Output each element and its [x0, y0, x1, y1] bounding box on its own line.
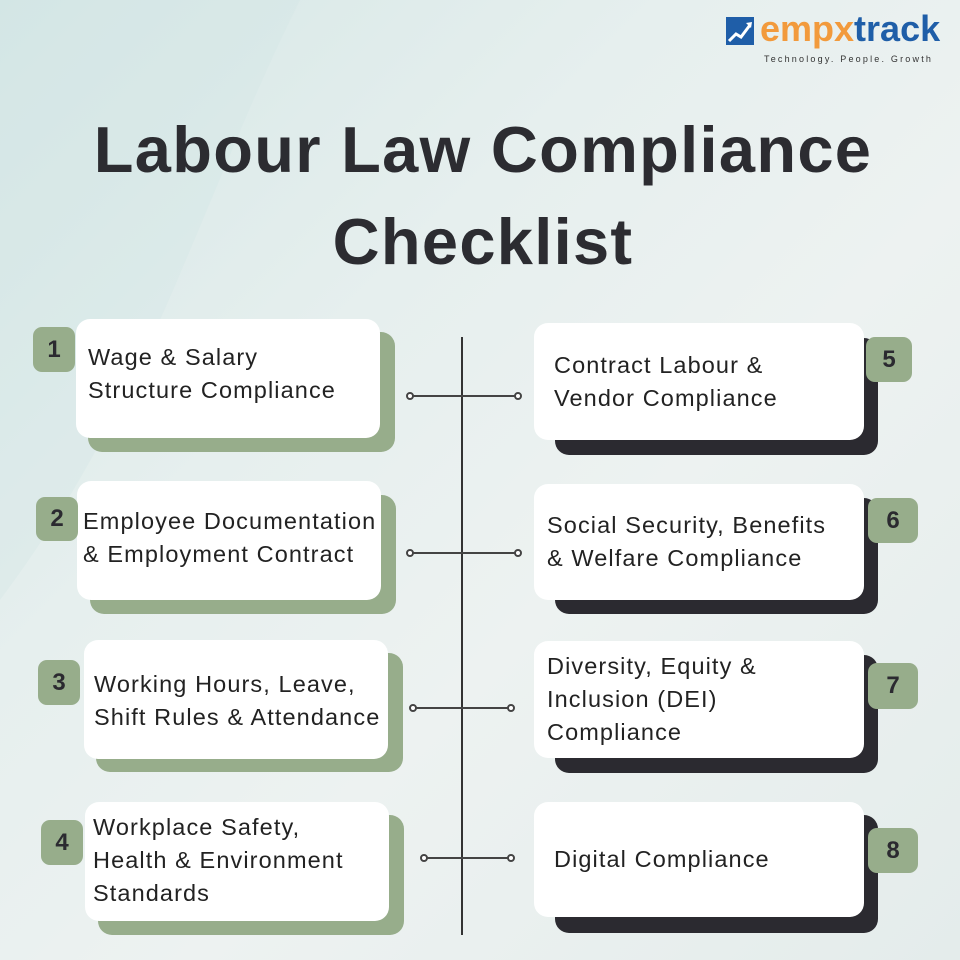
title line 2: Checklist: [333, 205, 633, 278]
item 7: Inclusion (DEI): [547, 686, 718, 712]
logo: Technology. People. Growth: [764, 54, 933, 64]
item 4: Health & Environment: [93, 847, 344, 873]
item 8: Digital Compliance: [554, 846, 770, 872]
item 4: Standards: [93, 880, 210, 906]
icon: chart logo: [726, 17, 754, 45]
logo: [726, 8, 940, 64]
item 1: [33, 319, 395, 452]
item 5: Contract Labour &: [554, 352, 763, 378]
item 2: Employee Documentation: [83, 508, 376, 534]
item 3: 3: [52, 668, 66, 696]
item 5: Vendor Compliance: [554, 384, 778, 410]
item 6: 6: [886, 506, 900, 534]
item 3: Shift Rules & Attendance: [94, 704, 380, 730]
item 3: Working Hours, Leave,: [94, 671, 356, 697]
item 4: Workplace Safety,: [93, 814, 300, 840]
logo: empxtrack: [760, 8, 940, 49]
item 6: & Welfare Compliance: [547, 545, 802, 571]
item 1: 1: [47, 336, 61, 362]
item 6: Social Security, Benefits: [547, 512, 826, 538]
item 6: [534, 484, 918, 614]
item 2: [36, 481, 396, 614]
item 2: & Employment Contract: [83, 541, 354, 567]
item 7: 7: [886, 672, 900, 699]
item 5: [534, 323, 912, 455]
item 7: Compliance: [547, 719, 682, 745]
item 5: 5: [882, 346, 896, 372]
item 7: Diversity, Equity &: [547, 653, 757, 679]
item 1: Structure Compliance: [88, 377, 336, 403]
item 1: Wage & Salary: [88, 344, 258, 370]
item 7: [534, 641, 918, 773]
item 8: [534, 802, 918, 933]
item 2: 2: [50, 505, 64, 532]
item 3: [38, 640, 403, 772]
item 4: [41, 802, 404, 935]
title: Labour Law Compliance: [94, 113, 872, 186]
item 4: 4: [55, 828, 69, 856]
item 8: 8: [886, 836, 900, 864]
